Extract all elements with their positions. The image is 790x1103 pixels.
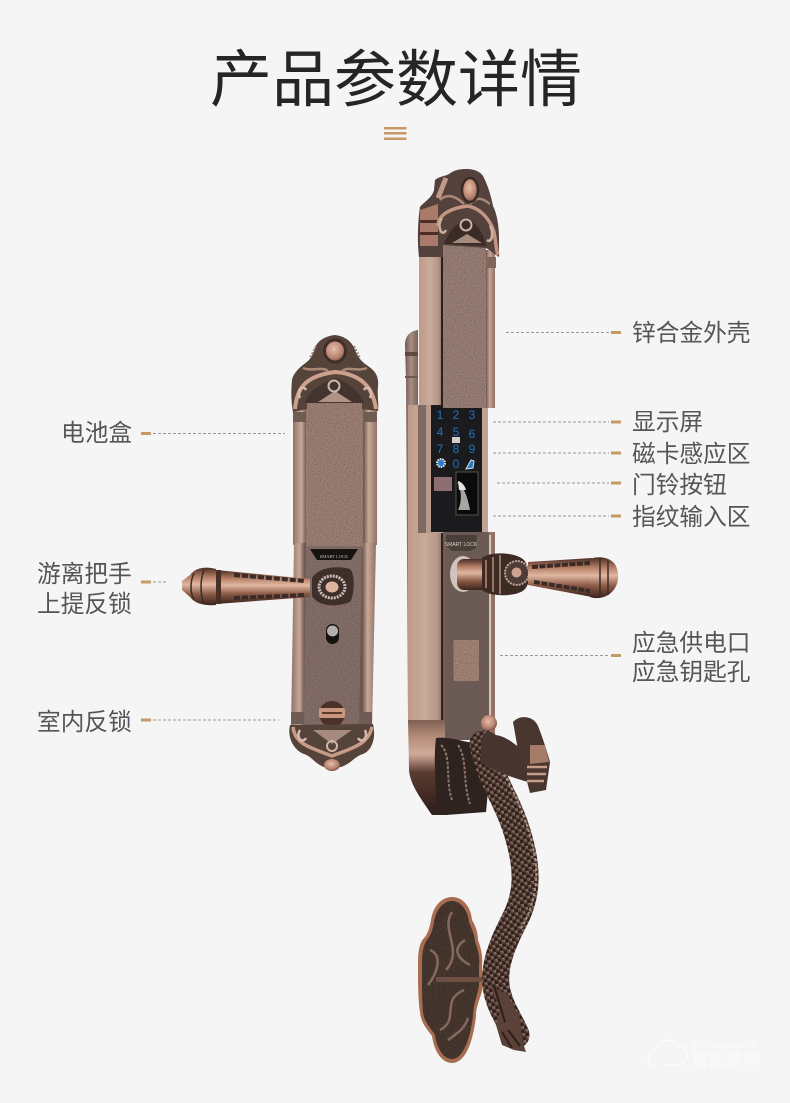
SMART LOCK tag: SMART LOCK bbox=[445, 542, 478, 548]
rear door frame strip bbox=[405, 330, 418, 720]
exterior lock body bbox=[405, 244, 496, 815]
lever bar bbox=[528, 558, 592, 597]
display bezel bbox=[418, 405, 488, 533]
callout: card reader zone bbox=[493, 441, 750, 468]
bottom ornament bbox=[289, 724, 374, 771]
lower textured plate bbox=[443, 532, 495, 740]
key cylinder knob bbox=[326, 624, 339, 644]
callout: emergency power and keyhole bbox=[500, 630, 750, 686]
keypad digits: 5 bbox=[453, 425, 460, 439]
SMART LOCK tag bbox=[445, 535, 478, 551]
dragon pull handle bbox=[418, 715, 550, 1063]
gear icon bbox=[437, 459, 445, 467]
notice sticker bbox=[434, 477, 452, 491]
keypad digits: 3 bbox=[469, 408, 476, 422]
keypad digits: 8 bbox=[453, 442, 460, 456]
fingerprint reader bbox=[456, 472, 478, 515]
callout: zinc alloy shell bbox=[506, 320, 750, 347]
textured centre panel bbox=[304, 402, 363, 730]
callout: card reader zone: 磁卡感应区 bbox=[632, 441, 750, 468]
keypad digits: 4 bbox=[437, 425, 444, 439]
exterior lever handle bbox=[450, 553, 618, 598]
callout: battery box: 电池盒 bbox=[61, 420, 132, 447]
watermark: Chinazsw.com bbox=[692, 1040, 756, 1051]
black SMART LOCK plate bbox=[310, 549, 358, 560]
foot scroll ornament bbox=[432, 738, 490, 815]
black SMART LOCK plate: SMART LOCK bbox=[320, 554, 349, 559]
callout: fingerprint zone bbox=[493, 504, 750, 531]
callout: doorbell button: 门铃按钮 bbox=[632, 472, 727, 499]
dragon neck bbox=[480, 730, 530, 782]
keypad digits: 2 bbox=[453, 408, 460, 422]
top ornament bbox=[291, 335, 378, 412]
dorsal fin bbox=[500, 765, 536, 930]
callout: display bbox=[493, 410, 703, 436]
rose bbox=[482, 553, 529, 595]
callout: free-clutch handle: 上提反锁 bbox=[37, 591, 132, 618]
callout: display: 显示屏 bbox=[632, 410, 703, 436]
dragon ball bbox=[481, 715, 497, 731]
bell icon bbox=[466, 460, 474, 469]
touch screen bbox=[418, 405, 482, 533]
watermark bbox=[648, 1040, 760, 1069]
title: 产品参数详情 bbox=[210, 46, 582, 115]
bottom foot of frame bbox=[408, 720, 445, 815]
keypad digits: 6 bbox=[469, 427, 476, 441]
dragon head bbox=[513, 717, 550, 793]
mounting plate bbox=[418, 897, 486, 1063]
plate body bbox=[291, 400, 377, 730]
callout: battery box bbox=[61, 420, 285, 447]
callout: free-clutch handle: 游离把手 bbox=[37, 561, 132, 588]
lever handle bbox=[182, 567, 354, 605]
indoor thumb turn bbox=[319, 701, 345, 727]
emergency port cover bbox=[454, 640, 479, 681]
callout: indoor deadlock bbox=[37, 709, 279, 736]
callout: free-clutch handle bbox=[37, 561, 168, 618]
dragon foot bbox=[490, 985, 526, 1052]
callout: doorbell button bbox=[497, 472, 727, 499]
serpentine body bbox=[483, 744, 525, 1035]
column shadow line bbox=[441, 532, 444, 732]
keypad digits: 9 bbox=[469, 442, 476, 456]
long left column bbox=[408, 405, 443, 725]
exterior top ornament bbox=[418, 169, 499, 257]
keypad digits: 0 bbox=[453, 457, 460, 471]
keypad digits: 7 bbox=[437, 442, 444, 456]
neck bbox=[457, 559, 487, 590]
callout: indoor deadlock: 室内反锁 bbox=[37, 709, 132, 736]
callout: zinc alloy shell: 锌合金外壳 bbox=[632, 320, 750, 347]
callout: fingerprint zone: 指纹输入区 bbox=[632, 504, 750, 531]
keypad digits: 1 bbox=[437, 408, 444, 422]
callout: emergency power and keyhole: 应急钥匙孔 bbox=[632, 659, 750, 686]
upper sliding cover bbox=[419, 244, 496, 408]
finial bbox=[590, 557, 618, 598]
icon: gold menu bars bbox=[384, 127, 406, 140]
card sensor icon bbox=[452, 437, 460, 443]
watermark: 智能锁网 bbox=[692, 1050, 760, 1069]
keypad digits bbox=[437, 408, 476, 471]
escutcheon ring bbox=[450, 556, 476, 592]
interior lock panel bbox=[182, 335, 378, 771]
callout: emergency power and keyhole: 应急供电口 bbox=[632, 630, 750, 657]
